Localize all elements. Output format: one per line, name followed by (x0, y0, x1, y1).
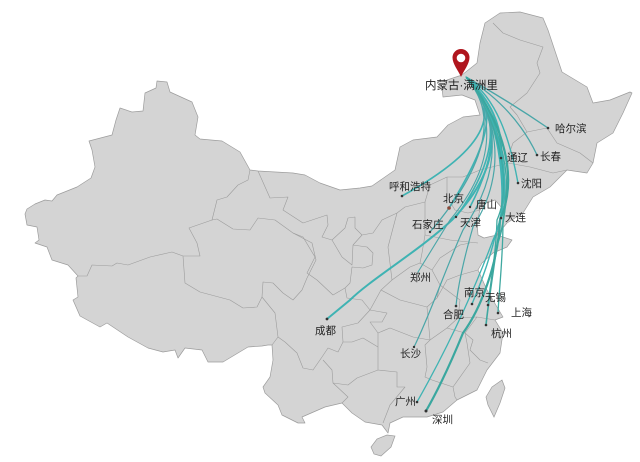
label: Hangzhou: 杭州 (491, 327, 512, 340)
label: Beijing: 北京 (443, 192, 464, 205)
route: Tianjin (456, 78, 490, 217)
route: Beijing (449, 78, 487, 208)
route: Wuxi (467, 78, 504, 305)
route: Chengdu (327, 78, 492, 319)
label: Shanghai: 上海 (511, 306, 532, 319)
label: Tongliao: 通辽 (507, 152, 528, 164)
route: Nanjing (467, 78, 503, 304)
province borders (78, 23, 593, 423)
label: Changsha: 长沙 (400, 348, 421, 360)
label: Hohhot: 呼和浩特 (389, 181, 431, 193)
route: Changchun (467, 78, 537, 155)
label: Shenzhen: 深圳 (432, 414, 453, 426)
label: Shenyang: 沈阳 (521, 177, 542, 190)
route: Tangshan (467, 78, 491, 207)
route: Tongliao (467, 78, 501, 158)
label: Tangshan: 唐山 (476, 198, 497, 211)
route: Hangzhou (467, 78, 505, 325)
label: Nanjing: 南京 (464, 286, 485, 299)
route: Shanghai (467, 78, 507, 313)
label: Dalian: 大连 (505, 211, 526, 224)
label: Wuxi: 无锡 (485, 291, 506, 304)
route: Shenzhen (426, 78, 508, 411)
label: Shijiazhuang: 石家庄 (412, 218, 444, 231)
label: Chengdu: 成都 (315, 325, 336, 337)
island: Taiwan (486, 380, 505, 417)
label: Harbin: 哈尔滨 (555, 122, 587, 135)
route: Hefei (456, 78, 495, 306)
route: Shijiazhuang (430, 78, 484, 232)
route: Hohhot (402, 78, 485, 196)
route: Guangzhou (417, 78, 505, 402)
route: Harbin (466, 77, 548, 128)
route: Zhengzhou (418, 78, 487, 272)
city dots (326, 127, 549, 412)
route lines from Manzhouli (327, 77, 548, 411)
route: Changsha (414, 78, 492, 347)
island: Hainan (371, 435, 395, 456)
route: Dalian (467, 78, 502, 218)
route: Shenyang (467, 78, 518, 183)
icon: location pin (452, 49, 470, 77)
label: Hefei: 合肥 (443, 308, 464, 321)
label: Guangzhou: 广州 (395, 396, 416, 408)
label: Zhengzhou: 郑州 (410, 271, 431, 284)
label: Tianjin: 天津 (460, 217, 481, 229)
label: Changchun: 长春 (540, 151, 561, 163)
label: origin: 内蒙古·满洲里 (425, 78, 498, 92)
